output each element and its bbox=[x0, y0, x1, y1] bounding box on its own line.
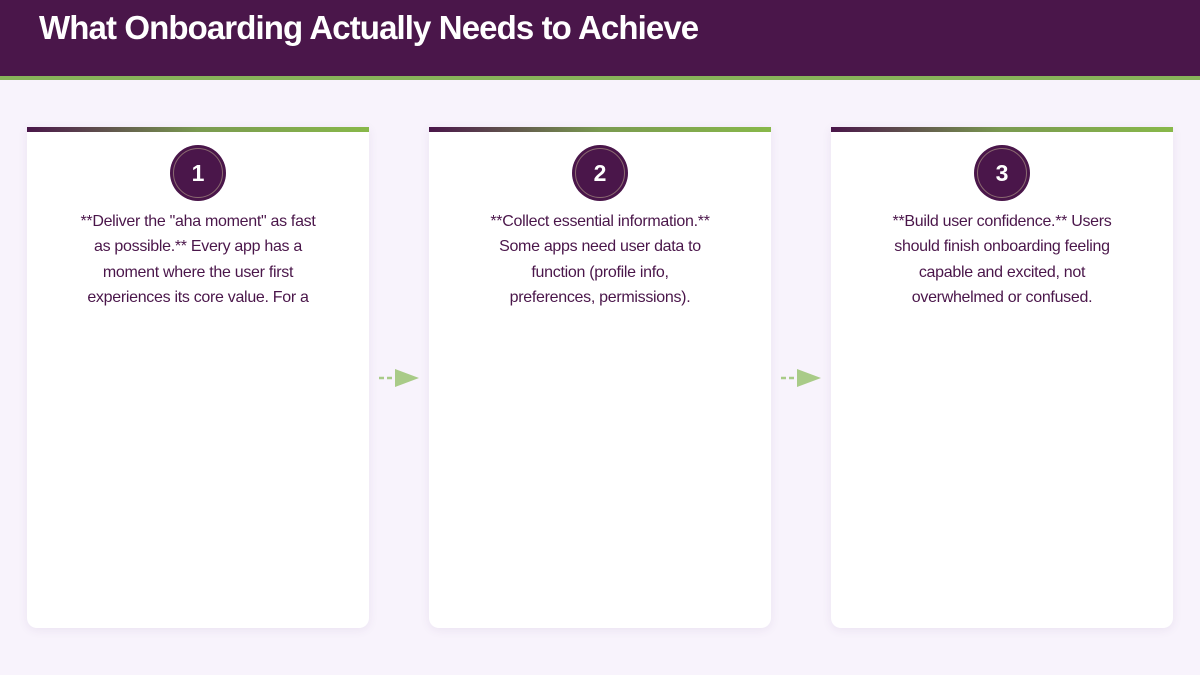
panel: card 3 bbox=[831, 127, 1173, 628]
text 1: **Deliver the "aha moment" as fast bbox=[80, 213, 316, 230]
text 2: Some apps need user data to bbox=[499, 238, 701, 255]
text 1: moment where the user first bbox=[103, 264, 293, 281]
text 3: **Build user confidence.** Users bbox=[893, 213, 1111, 230]
text 3: capable and excited, not bbox=[919, 264, 1085, 281]
header bbox=[0, 0, 1200, 80]
badge 2: 2 bbox=[594, 160, 606, 186]
arrow 1 bbox=[379, 369, 419, 387]
text 2: preferences, permissions). bbox=[510, 289, 690, 306]
text 2: **Collect essential information.** bbox=[490, 213, 710, 230]
badge 3: 3 bbox=[996, 160, 1008, 186]
text 3: should finish onboarding feeling bbox=[894, 238, 1110, 255]
badge 2 bbox=[572, 145, 628, 201]
text 3 bbox=[892, 213, 1112, 306]
panel: card 2 bbox=[429, 127, 771, 628]
panel: card 1 bbox=[27, 127, 369, 628]
text 1: experiences its core value. For a bbox=[87, 289, 309, 306]
badge 3 bbox=[974, 145, 1030, 201]
badge 1 bbox=[170, 145, 226, 201]
arrow 2 bbox=[781, 369, 821, 387]
text 2: function (profile info, bbox=[531, 264, 669, 281]
badge 1: 1 bbox=[192, 160, 204, 186]
text 1: as possible.** Every app has a bbox=[94, 238, 302, 255]
text 1 bbox=[80, 213, 316, 306]
text 3: overwhelmed or confused. bbox=[912, 289, 1092, 306]
text 2 bbox=[490, 213, 710, 306]
title: What Onboarding Actually Needs to Achieve bbox=[39, 9, 698, 46]
